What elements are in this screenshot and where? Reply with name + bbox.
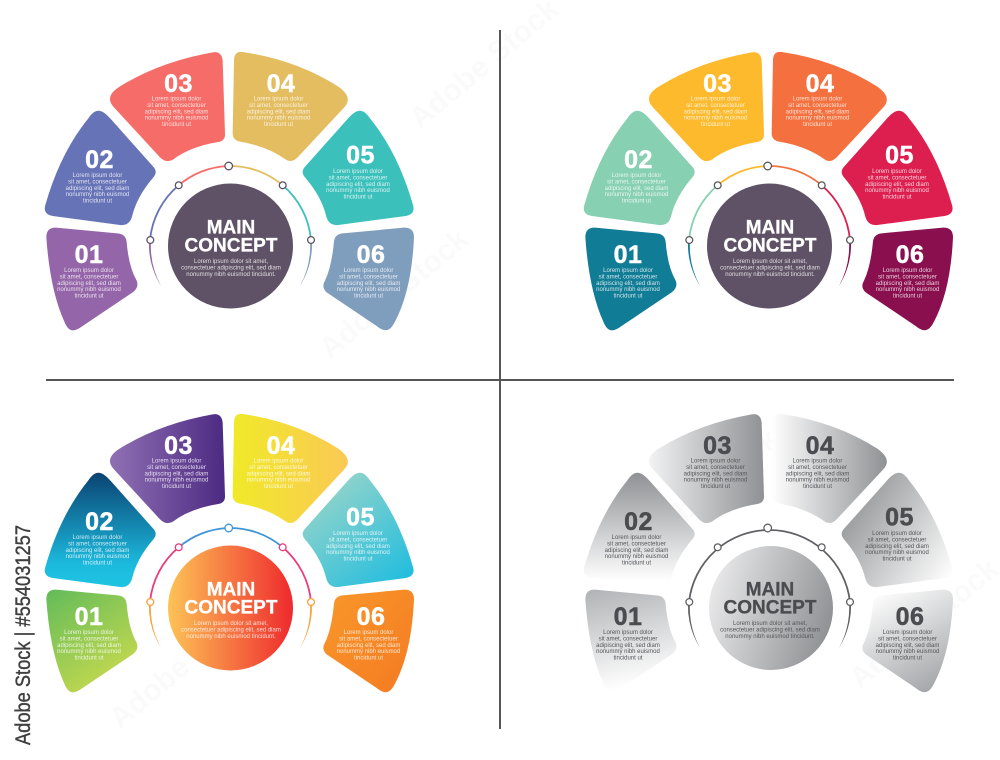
segment 03: Lorem ipsum dolor	[152, 458, 201, 464]
segment 05: tincidunt ut	[882, 557, 912, 563]
segment 05: tincidunt ut	[882, 195, 912, 201]
segment 05: 05	[885, 142, 914, 170]
segment 04: adipiscing elit, sed diam	[786, 109, 849, 115]
segment 04: sit amet, consectetuer	[788, 465, 847, 471]
segment 01	[585, 228, 676, 330]
segment 04: Lorem ipsum dolor	[254, 458, 303, 464]
segment 01	[46, 228, 137, 330]
segment 06: Lorem ipsum dolor	[883, 268, 932, 274]
main concept circle: MAIN	[207, 218, 255, 238]
segment 04: 04	[806, 432, 834, 460]
segment 02	[45, 111, 156, 225]
segment 02	[584, 111, 695, 225]
main concept circle: Lorem ipsum dolor sit amet,	[194, 259, 268, 265]
segment 03: 03	[703, 432, 732, 460]
arc with nodes	[686, 524, 853, 648]
segment 01	[585, 590, 676, 692]
segment 01: 01	[75, 603, 103, 631]
segment 01: adipiscing elit, sed diam	[57, 281, 121, 287]
segment 06: sit amet, consectetuer	[878, 274, 937, 280]
segment 05: nonummy nibh euismod	[326, 188, 390, 194]
segment 04: nonummy nibh euismod	[786, 116, 849, 122]
main concept circle: nonummy nibh euismod tincidunt.	[725, 634, 815, 640]
segment 06: sit amet, consectetuer	[878, 636, 937, 642]
segment 01: Lorem ipsum dolor	[603, 630, 653, 636]
segment 04: sit amet, consectetuer	[249, 103, 308, 109]
segment 06: sit amet, consectetuer	[339, 274, 398, 280]
segment 04: Lorem ipsum dolor	[793, 458, 842, 464]
segment 05: adipiscing elit, sed diam	[865, 182, 929, 188]
segment 06: 06	[896, 603, 924, 631]
segment 03: sit amet, consectetuer	[147, 103, 206, 109]
segment 06: tincidunt ut	[893, 294, 922, 300]
segment 04	[233, 414, 348, 523]
segment 02: 02	[624, 146, 653, 174]
segment 04	[772, 52, 887, 161]
segment 02: Lorem ipsum dolor	[612, 535, 661, 541]
segment 03: nonummy nibh euismod	[684, 478, 747, 484]
segment 03: nonummy nibh euismod	[684, 116, 747, 122]
segment 04: adipiscing elit, sed diam	[247, 471, 310, 477]
segment 03	[649, 414, 764, 523]
segment 04: 04	[267, 432, 295, 460]
segment 01: Lorem ipsum dolor	[64, 630, 114, 636]
segment 05	[842, 473, 953, 587]
segment 04: tincidunt ut	[803, 122, 832, 128]
segment 06: tincidunt ut	[893, 656, 922, 662]
segment 02: nonummy nibh euismod	[605, 192, 668, 198]
segment 01: tincidunt ut	[74, 656, 104, 662]
segment 03: 03	[164, 70, 193, 98]
segment 03: sit amet, consectetuer	[147, 465, 206, 471]
segment 04: sit amet, consectetuer	[788, 103, 847, 109]
segment 05	[842, 111, 953, 225]
segment 05: nonummy nibh euismod	[326, 550, 390, 556]
segment 03: 03	[703, 70, 732, 98]
segment 06: 06	[357, 603, 385, 631]
segment 05: Lorem ipsum dolor	[872, 531, 922, 537]
segment 02	[45, 473, 156, 587]
segment 02: nonummy nibh euismod	[66, 192, 129, 198]
segment 03: adipiscing elit, sed diam	[684, 109, 747, 115]
main concept circle: Lorem ipsum dolor sit amet,	[733, 621, 807, 627]
segment 06: adipiscing elit, sed diam	[337, 643, 400, 649]
panel: greyscale gradient	[584, 414, 953, 692]
segment 01: adipiscing elit, sed diam	[57, 643, 121, 649]
main concept circle: consectetuer adipiscing elit, sed diam	[720, 627, 820, 633]
arc with nodes	[147, 162, 314, 286]
main concept circle: Lorem ipsum dolor sit amet,	[194, 621, 268, 627]
segment 02: Lorem ipsum dolor	[612, 173, 661, 179]
segment 02: adipiscing elit, sed diam	[66, 186, 129, 192]
segment 05	[303, 111, 414, 225]
watermark text: Adobe Stock	[623, 422, 785, 565]
segment 03: tincidunt ut	[162, 122, 191, 128]
segment 02: tincidunt ut	[622, 199, 651, 205]
segment 06: Lorem ipsum dolor	[344, 268, 393, 274]
main concept circle	[707, 184, 832, 308]
main concept circle: CONCEPT	[724, 598, 817, 618]
main concept circle	[709, 546, 833, 670]
segment 05: sit amet, consectetuer	[868, 537, 926, 543]
segment 05: sit amet, consectetuer	[329, 175, 387, 181]
segment 03: nonummy nibh euismod	[145, 116, 208, 122]
segment 04: sit amet, consectetuer	[249, 465, 308, 471]
main concept circle: nonummy nibh euismod tincidunt.	[186, 272, 276, 278]
segment 06: tincidunt ut	[354, 294, 383, 300]
segment 04: tincidunt ut	[264, 122, 293, 128]
segment 04: Lorem ipsum dolor	[793, 96, 842, 102]
segment 02: sit amet, consectetuer	[607, 541, 666, 547]
segment 05: Lorem ipsum dolor	[333, 169, 383, 175]
segment 04: 04	[267, 70, 295, 98]
segment 03: sit amet, consectetuer	[686, 465, 745, 471]
segment 02: nonummy nibh euismod	[605, 554, 668, 560]
segment 02: 02	[85, 146, 114, 174]
segment 06: Lorem ipsum dolor	[344, 630, 393, 636]
segment 06: nonummy nibh euismod	[337, 649, 400, 655]
main concept circle: consectetuer adipiscing elit, sed diam	[181, 265, 281, 271]
watermark text: Adobe Stock	[313, 222, 475, 365]
segment 01: sit amet, consectetuer	[599, 274, 657, 280]
segment 02: 02	[624, 508, 653, 536]
panel: flat muted palette	[45, 52, 414, 330]
main concept circle	[168, 184, 293, 308]
segment 01	[46, 590, 137, 692]
segment 06	[323, 228, 414, 330]
segment 03: adipiscing elit, sed diam	[684, 471, 747, 477]
panel: vivid flat palette	[584, 52, 953, 330]
segment 01: nonummy nibh euismod	[57, 649, 121, 655]
segment 01: nonummy nibh euismod	[596, 649, 660, 655]
segment 04: nonummy nibh euismod	[247, 116, 310, 122]
segment 01: 01	[614, 241, 642, 269]
segment 01: 01	[614, 603, 642, 631]
segment 05: adipiscing elit, sed diam	[326, 544, 390, 550]
segment 02: Lorem ipsum dolor	[73, 535, 122, 541]
segment 02	[584, 473, 695, 587]
side credit text: Adobe Stock | #554031257	[12, 525, 35, 745]
segment 02: tincidunt ut	[83, 561, 112, 567]
segment 04: adipiscing elit, sed diam	[786, 471, 849, 477]
main concept circle: MAIN	[746, 218, 794, 238]
segment 04: tincidunt ut	[803, 484, 832, 490]
segment 03	[110, 52, 225, 161]
segment 01: nonummy nibh euismod	[57, 287, 121, 293]
segment 03	[649, 52, 764, 161]
segment 03: tincidunt ut	[701, 122, 730, 128]
segment 03	[110, 414, 225, 523]
segment 01: tincidunt ut	[613, 656, 643, 662]
segment 06: nonummy nibh euismod	[876, 287, 939, 293]
segment 06: tincidunt ut	[354, 656, 383, 662]
segment 02: adipiscing elit, sed diam	[605, 548, 668, 554]
segment 04: 04	[806, 70, 834, 98]
segment 05: Lorem ipsum dolor	[333, 531, 383, 537]
segment 05: adipiscing elit, sed diam	[326, 182, 390, 188]
panel: gradient palette	[45, 414, 414, 692]
segment 06	[862, 590, 953, 692]
segment 03: tincidunt ut	[701, 484, 730, 490]
segment 04: Lorem ipsum dolor	[254, 96, 303, 102]
main concept circle: CONCEPT	[185, 598, 278, 618]
segment 05	[303, 473, 414, 587]
segment 02: adipiscing elit, sed diam	[605, 186, 668, 192]
main concept circle: CONCEPT	[185, 236, 278, 256]
segment 02: adipiscing elit, sed diam	[66, 548, 129, 554]
watermark text: Adobe Stock	[103, 592, 265, 735]
segment 03: Lorem ipsum dolor	[691, 96, 740, 102]
main concept circle: consectetuer adipiscing elit, sed diam	[720, 265, 820, 271]
segment 03: adipiscing elit, sed diam	[145, 109, 208, 115]
segment 06: Lorem ipsum dolor	[883, 630, 932, 636]
segment 01: adipiscing elit, sed diam	[596, 281, 660, 287]
segment 06: 06	[357, 241, 385, 269]
segment 05: adipiscing elit, sed diam	[865, 544, 929, 550]
segment 03: nonummy nibh euismod	[145, 478, 208, 484]
vertical divider	[499, 30, 501, 729]
segment 03: Lorem ipsum dolor	[691, 458, 740, 464]
segment 06: 06	[896, 241, 924, 269]
segment 03: tincidunt ut	[162, 484, 191, 490]
main concept circle	[168, 546, 293, 670]
segment 06: adipiscing elit, sed diam	[876, 643, 939, 649]
segment 02: sit amet, consectetuer	[68, 179, 127, 185]
segment 06	[862, 228, 953, 330]
segment 06: nonummy nibh euismod	[337, 287, 400, 293]
segment 06	[323, 590, 414, 692]
main concept circle: MAIN	[746, 580, 794, 600]
segment 05: sit amet, consectetuer	[868, 175, 926, 181]
segment 01: sit amet, consectetuer	[60, 636, 118, 642]
segment 03: 03	[164, 432, 193, 460]
main concept circle: nonummy nibh euismod tincidunt.	[725, 272, 815, 278]
segment 03: adipiscing elit, sed diam	[145, 471, 208, 477]
segment 03: Lorem ipsum dolor	[152, 96, 201, 102]
segment 02: sit amet, consectetuer	[68, 541, 127, 547]
segment 06: adipiscing elit, sed diam	[876, 281, 939, 287]
segment 02: tincidunt ut	[83, 199, 112, 205]
segment 06: nonummy nibh euismod	[876, 649, 939, 655]
segment 01: Lorem ipsum dolor	[603, 268, 653, 274]
segment 03: sit amet, consectetuer	[686, 103, 745, 109]
arc with nodes	[147, 524, 314, 648]
segment 01: tincidunt ut	[74, 294, 104, 300]
segment 01: tincidunt ut	[613, 294, 643, 300]
segment 02: nonummy nibh euismod	[66, 554, 129, 560]
segment 01: 01	[75, 241, 103, 269]
segment 05: sit amet, consectetuer	[329, 537, 387, 543]
segment 05: tincidunt ut	[343, 195, 373, 201]
main concept circle: nonummy nibh euismod tincidunt.	[186, 634, 276, 640]
segment 02: Lorem ipsum dolor	[73, 173, 122, 179]
segment 05: 05	[346, 504, 375, 532]
segment 05: 05	[346, 142, 375, 170]
segment 06: sit amet, consectetuer	[339, 636, 398, 642]
segment 01: sit amet, consectetuer	[60, 274, 118, 280]
main concept circle: Lorem ipsum dolor sit amet,	[733, 259, 807, 265]
segment 01: nonummy nibh euismod	[596, 287, 660, 293]
main concept circle: consectetuer adipiscing elit, sed diam	[181, 627, 281, 633]
segment 06: adipiscing elit, sed diam	[337, 281, 400, 287]
segment 01: Lorem ipsum dolor	[64, 268, 114, 274]
segment 04: tincidunt ut	[264, 484, 293, 490]
segment 05: 05	[885, 504, 914, 532]
segment 05: nonummy nibh euismod	[865, 188, 929, 194]
segment 04: adipiscing elit, sed diam	[247, 109, 310, 115]
segment 02: 02	[85, 508, 114, 536]
segment 04: nonummy nibh euismod	[786, 478, 849, 484]
horizontal divider	[46, 379, 954, 381]
segment 01: adipiscing elit, sed diam	[596, 643, 660, 649]
segment 01: sit amet, consectetuer	[599, 636, 657, 642]
segment 04: nonummy nibh euismod	[247, 478, 310, 484]
segment 05: nonummy nibh euismod	[865, 550, 929, 556]
main concept circle: CONCEPT	[724, 236, 817, 256]
segment 02: tincidunt ut	[622, 561, 651, 567]
segment 05: Lorem ipsum dolor	[872, 169, 922, 175]
segment 04	[772, 414, 887, 523]
arc with nodes	[686, 162, 853, 286]
main concept circle: MAIN	[207, 580, 255, 600]
segment 04	[233, 52, 348, 161]
segment 02: sit amet, consectetuer	[607, 179, 666, 185]
segment 05: tincidunt ut	[343, 557, 373, 563]
